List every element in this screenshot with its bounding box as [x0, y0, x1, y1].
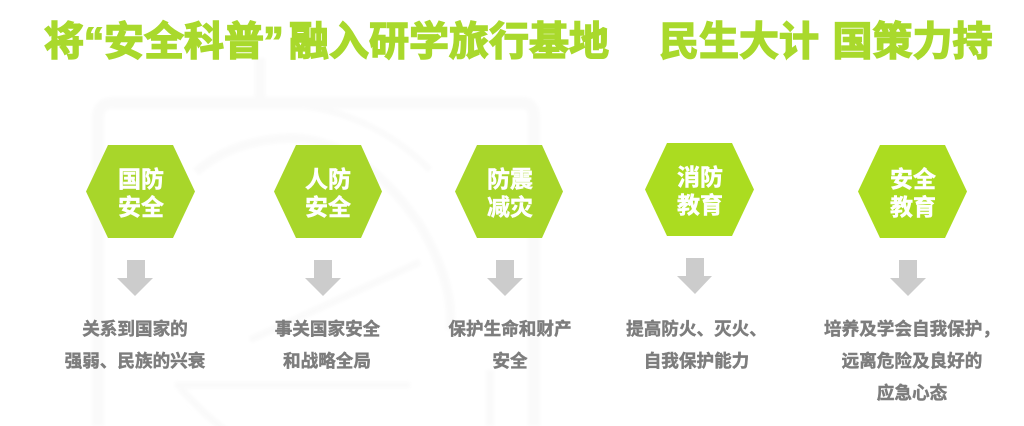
panel: 国防安全	[65, 145, 206, 371]
hexagon: 安全教育: 安全	[890, 166, 936, 192]
arrow: 人防安全	[305, 260, 341, 296]
description: 国防安全: 关系到国家的	[82, 319, 188, 339]
description: 防震减灾: 安全	[492, 351, 528, 371]
hexagon: 国防安全: 安全	[118, 194, 164, 220]
background watermark	[98, 58, 534, 426]
description: 国防安全	[65, 319, 206, 371]
panel: 人防安全	[274, 145, 382, 371]
hexagon: 防震减灾	[455, 145, 563, 238]
hexagon: 人防安全	[274, 145, 382, 238]
arrow: 防震减灾	[487, 260, 523, 296]
title: left heading: 将	[44, 20, 84, 64]
description: 消防教育: 提高防火、灭火、	[626, 319, 767, 339]
title: left heading: “	[84, 20, 104, 64]
panel: 消防教育	[626, 143, 767, 371]
hexagon: 消防教育: 教育	[677, 192, 723, 218]
hexagon: 安全教育	[858, 145, 967, 238]
hexagon: 消防教育	[645, 143, 754, 236]
hexagon: 防震减灾: 减灾	[487, 194, 533, 220]
description: 国防安全: 强弱、民族的兴衰	[65, 351, 206, 371]
description: 消防教育	[626, 319, 767, 371]
title: right heading: 民生大计	[659, 20, 819, 64]
panel: 安全教育	[824, 145, 1000, 403]
arrow: 安全教育	[890, 260, 926, 296]
hexagon: 防震减灾: 防震	[487, 166, 533, 192]
hexagon: 人防安全: 安全	[305, 194, 351, 220]
hexagon: 国防安全	[86, 145, 195, 238]
description: 安全教育: 培养及学会自我保护，	[824, 319, 1000, 339]
hexagon: 国防安全: 国防	[118, 166, 164, 192]
arrow: 国防安全	[117, 260, 153, 296]
title: left heading: 安全科普	[104, 20, 264, 64]
arrow: 消防教育	[677, 258, 712, 294]
title: left heading: 融入研学旅行基地	[289, 20, 609, 64]
description: 人防安全: 和战略全局	[283, 351, 371, 371]
title: left heading: ”	[264, 20, 284, 64]
hexagon: 安全教育: 教育	[890, 194, 936, 220]
hexagon: 人防安全: 人防	[305, 166, 351, 192]
panel: 防震减灾	[448, 145, 572, 371]
description: 安全教育: 远离危险及良好的	[842, 351, 982, 371]
description: 防震减灾	[448, 319, 572, 371]
title: right heading: 国策力持	[832, 20, 992, 64]
description: 人防安全: 事关国家安全	[275, 319, 381, 339]
hexagon: 消防教育: 消防	[677, 164, 723, 190]
description: 防震减灾: 保护生命和财产	[448, 319, 572, 339]
description: 人防安全	[275, 319, 381, 371]
description: 安全教育: 应急心态	[877, 383, 948, 403]
description: 安全教育	[824, 319, 1000, 403]
description: 消防教育: 自我保护能力	[644, 351, 749, 371]
